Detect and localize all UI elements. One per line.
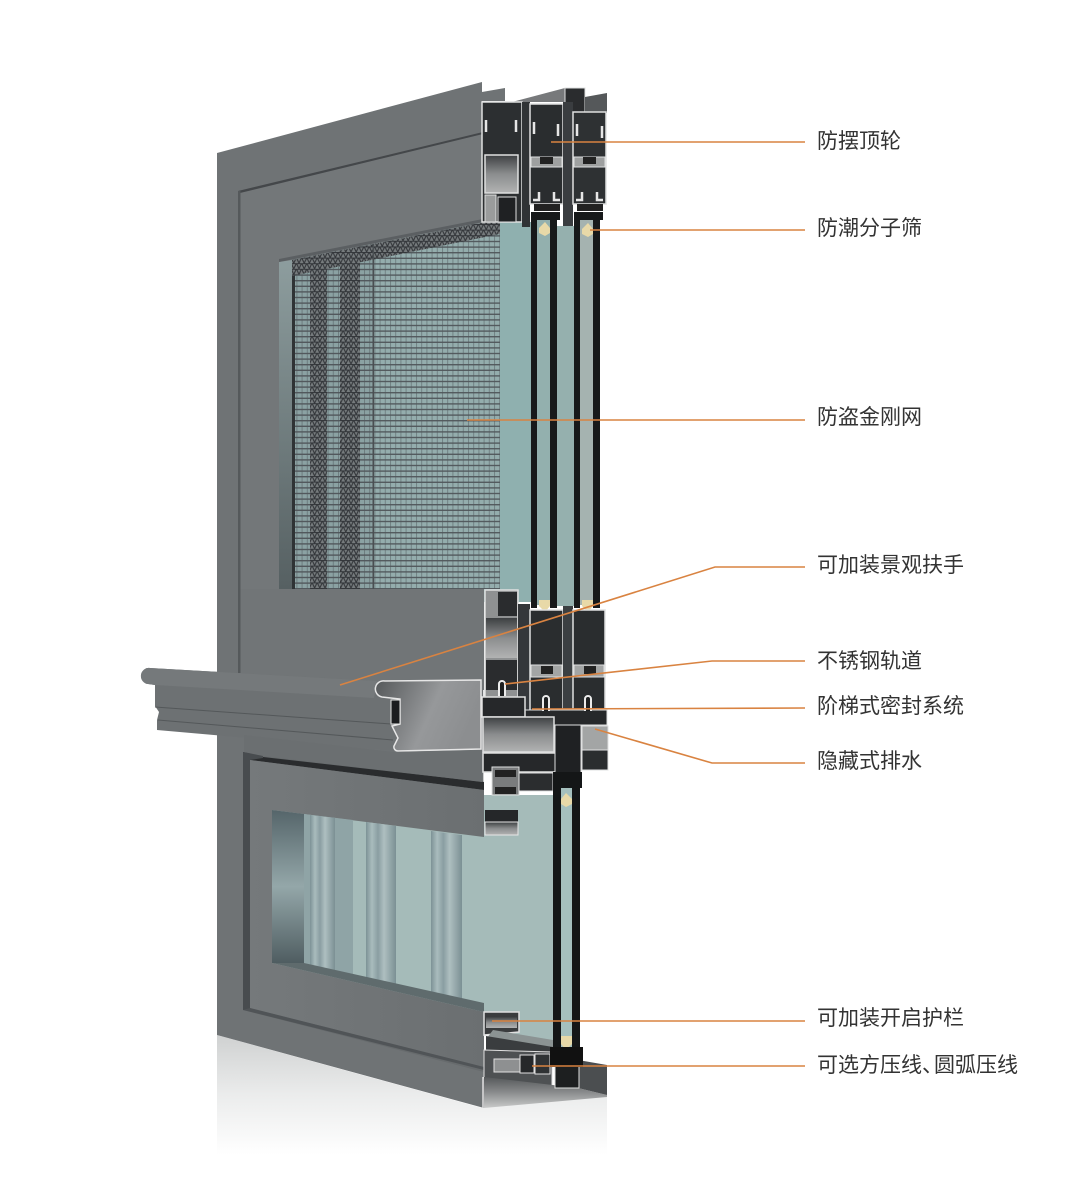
callout lines [340, 142, 805, 1066]
left stack [482, 697, 525, 717]
line: 可加装景观扶手 [340, 567, 805, 685]
top groove [238, 132, 483, 193]
upper opening: glass and security mesh [279, 215, 531, 602]
middle frame section [482, 590, 608, 795]
front frame face [217, 82, 484, 1108]
line: 防潮分子筛 [590, 229, 805, 231]
line: 防摆顶轮 [551, 141, 805, 143]
label: 可加装景观扶手 [817, 554, 964, 577]
line: 不锈钢轨道 [505, 661, 805, 684]
line: 防盗金刚网 [467, 419, 805, 421]
black glass bars [531, 212, 537, 608]
desiccant bottom [539, 600, 550, 612]
lower opening: glass and bars [272, 795, 553, 1052]
bottom frame section [483, 1012, 607, 1108]
callout labels [817, 130, 1018, 1077]
sash columns [530, 610, 563, 712]
right profile [563, 102, 573, 227]
label: 防潮分子筛 [817, 217, 922, 240]
centre interlock [555, 725, 581, 775]
opening reveal [279, 260, 292, 589]
left groove [238, 191, 240, 673]
label: 防盗金刚网 [817, 406, 922, 429]
outer surface [484, 1077, 607, 1108]
line: 隐藏式排水 [595, 729, 805, 763]
top frame section [482, 88, 607, 227]
label: 不锈钢轨道 [817, 650, 922, 673]
label: 防摆顶轮 [817, 130, 901, 153]
track band [525, 710, 607, 725]
label: 可选方压线、圆弧压线 [817, 1054, 1018, 1077]
face under sill [244, 735, 482, 782]
clips [486, 120, 602, 138]
bottom groove [243, 1008, 484, 1070]
triple glazing units upper [531, 212, 603, 612]
floor reflection [217, 1035, 607, 1155]
middle profile [522, 102, 530, 227]
base profiles [484, 1050, 552, 1086]
sill handrail [141, 668, 482, 782]
glass beside mesh [484, 222, 531, 602]
right stack [582, 726, 608, 750]
sill body [141, 668, 398, 751]
lower guard profile top [485, 810, 518, 835]
bars [310, 815, 335, 973]
line: 可选方压线 [532, 1065, 805, 1067]
infographic: window profile cross-section with callouts [140, 82, 1018, 1130]
sill section [375, 680, 481, 751]
desiccant top [539, 222, 550, 236]
glass bottom gasket [487, 1030, 553, 1048]
guard profile [484, 1012, 519, 1035]
left profile [485, 590, 518, 700]
gasket heads [534, 204, 560, 211]
lower glazing unit [553, 772, 582, 1055]
left profile [482, 102, 522, 222]
label: 阶梯式密封系统 [817, 695, 964, 718]
line: 阶梯式密封系统 [532, 708, 805, 709]
lower sash panel [243, 752, 484, 1072]
label: 可加装开启护栏 [817, 1007, 964, 1030]
label: 隐藏式排水 [817, 750, 922, 773]
line: 可加装开启护栏 [492, 1020, 805, 1022]
bottom ledge [272, 963, 484, 1012]
glass [272, 795, 553, 1052]
top caps [482, 88, 505, 101]
mesh [292, 215, 500, 589]
sill lip [141, 668, 377, 698]
